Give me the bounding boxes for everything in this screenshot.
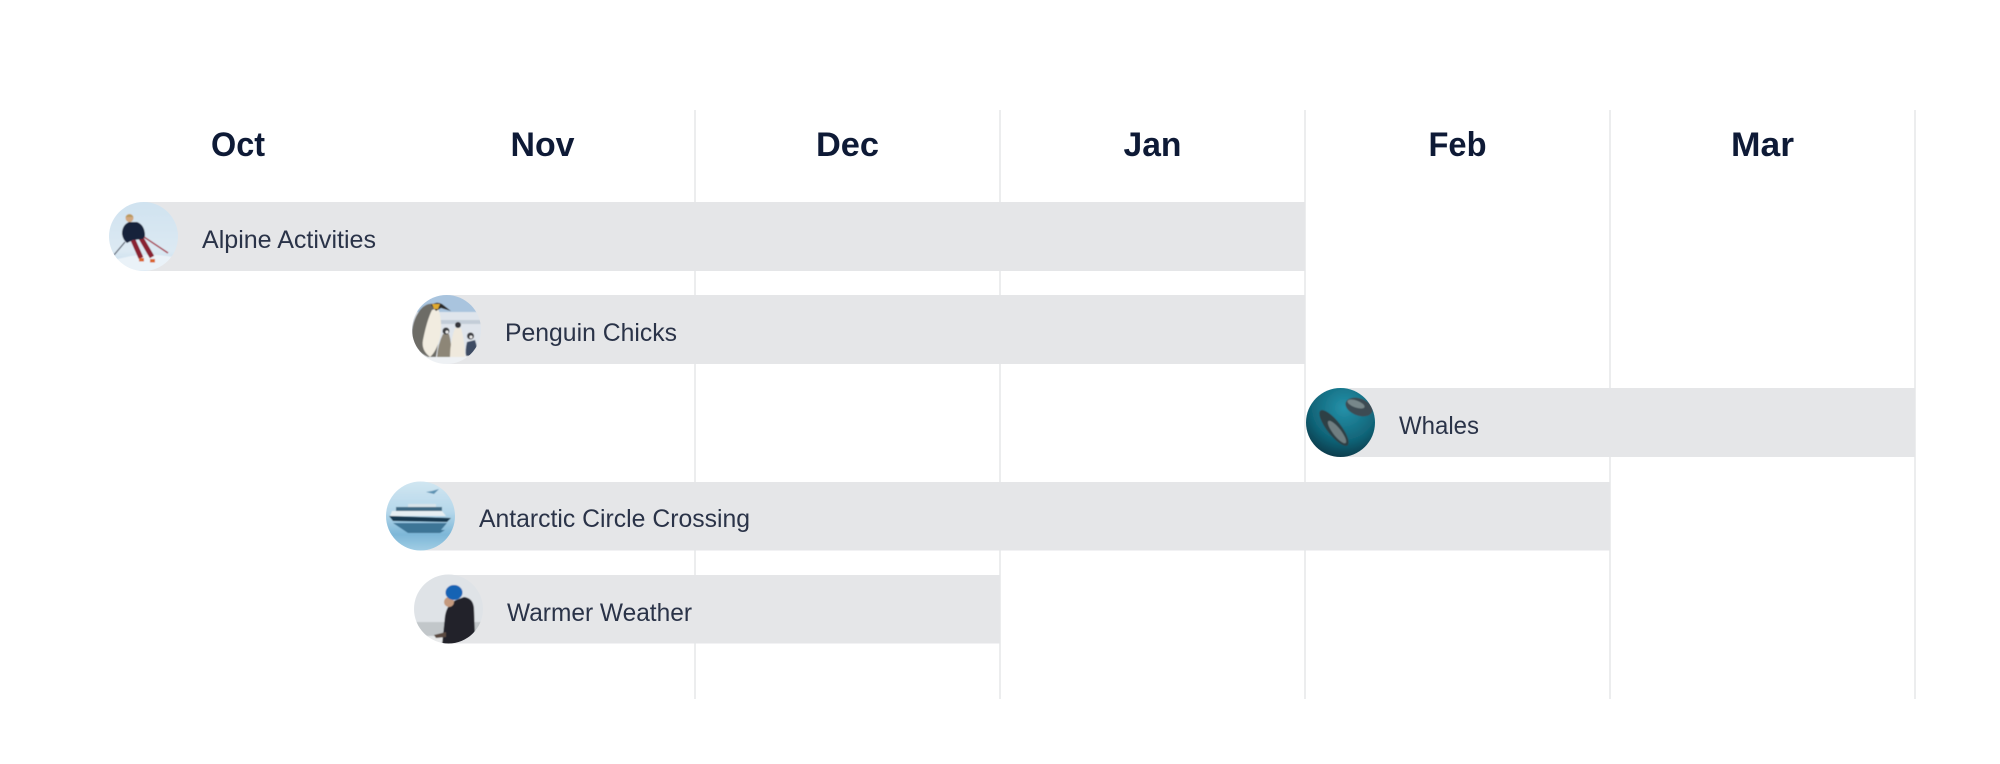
icon: whales photo <box>1306 388 1375 457</box>
month headers: Feb <box>1428 126 1486 164</box>
label: Warmer Weather: Warmer Weather <box>507 599 692 627</box>
month headers: Nov <box>510 126 575 164</box>
month grid lines <box>695 110 1915 699</box>
bar: Antarctic Circle Crossing Nov to Feb <box>420 482 1610 550</box>
bar: Alpine Activities Oct to Jan <box>143 202 1305 271</box>
label: Alpine Activities: Alpine Activities <box>202 226 376 254</box>
icon: penguin photo <box>412 295 480 364</box>
month headers: Oct <box>211 126 265 164</box>
icon: man in blue hat photo <box>414 574 480 644</box>
label: Penguin Chicks: Penguin Chicks <box>505 319 677 347</box>
timeline chart <box>109 110 1916 699</box>
row: Penguin Chicks <box>410 293 1305 366</box>
label: Antarctic Circle Crossing: Antarctic Circle Crossing <box>479 505 750 533</box>
row: Antarctic Circle Crossing <box>384 479 1610 553</box>
row: Alpine Activities <box>107 200 1305 273</box>
row: Warmer Weather <box>412 572 1000 646</box>
month headers <box>211 126 1794 164</box>
icon: skier photo <box>109 202 178 271</box>
icon: ship photo <box>386 482 455 550</box>
row: Whales <box>1304 386 1915 459</box>
month headers: Dec <box>816 126 879 164</box>
month headers: Mar <box>1731 126 1794 164</box>
bar: Whales Feb to Mar <box>1340 388 1915 457</box>
bar: Warmer Weather Nov to Dec <box>448 575 1000 644</box>
label: Whales: Whales <box>1399 412 1479 440</box>
month headers: Jan <box>1124 126 1182 164</box>
bar: Penguin Chicks Nov to Jan <box>446 295 1305 364</box>
